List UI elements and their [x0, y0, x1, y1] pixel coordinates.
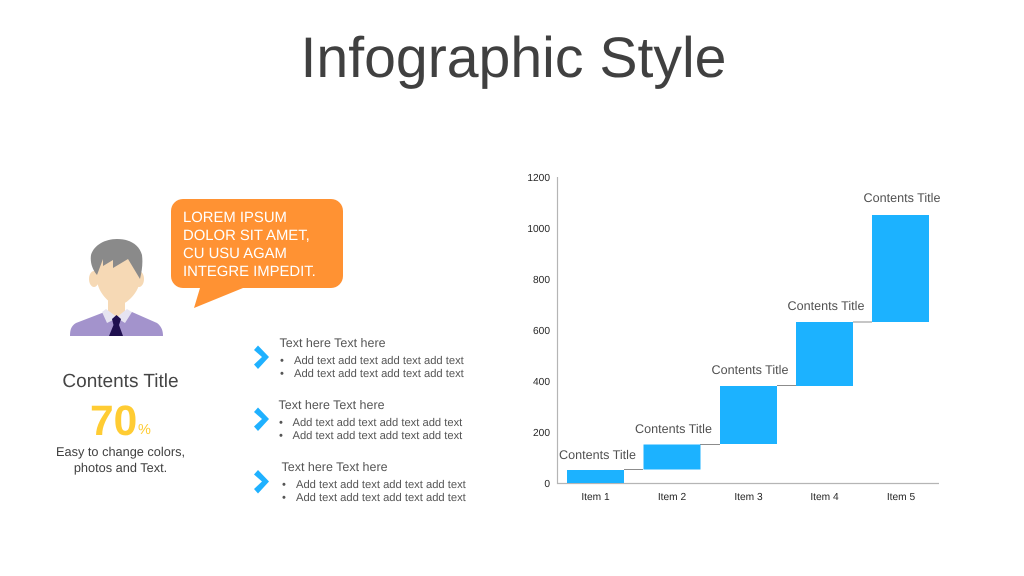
text block: list 2 [278, 398, 463, 442]
panel: list group 1 [254, 336, 465, 380]
text block: list 3: Add text add text add text add text [296, 492, 467, 504]
bar labels: Contents Title [559, 448, 636, 462]
text block: list 2: Add text add text add text add text [292, 430, 463, 442]
bar labels: Contents Title [787, 299, 865, 313]
y axis: 1000 [527, 224, 550, 235]
figure: 70 percent: % [138, 422, 151, 438]
text block: list 3 [282, 460, 467, 504]
panel: list group 3 [254, 460, 467, 504]
bar labels: Contents Title [863, 191, 941, 205]
x axis labels: Item 1 [581, 492, 610, 503]
text block: description: Easy to change colors, [56, 444, 185, 459]
text block: list 2: Text here Text here [278, 398, 385, 412]
callout: speech bubble: CU USU AGAM [183, 246, 287, 262]
connector lines [624, 322, 872, 470]
y axis: 200 [533, 428, 550, 439]
text block: list 1: • [280, 368, 284, 380]
text block: list 1 [280, 336, 465, 380]
x axis labels: Item 4 [810, 492, 839, 503]
text block: list 2: • [279, 430, 283, 442]
y axis [527, 173, 939, 490]
title: Infographic Style [301, 26, 726, 90]
text block: list 2: • [279, 417, 283, 429]
bar labels: Contents Title [711, 363, 789, 377]
text block: list 1: Add text add text add text add text [294, 355, 465, 367]
x axis labels: Item 5 [887, 492, 915, 503]
icon: chevron [254, 408, 269, 431]
text block: list 1: • [280, 355, 284, 367]
text block: list 3: • [282, 492, 286, 504]
bar labels [559, 191, 941, 462]
y axis: 400 [533, 377, 550, 388]
y axis: 1200 [527, 173, 550, 184]
chart: waterfall bar chart [527, 173, 941, 503]
text block: description [56, 444, 185, 475]
text block: list 2: Add text add text add text add text [292, 417, 463, 429]
text block: list 3: Text here Text here [282, 460, 388, 474]
y axis: 800 [533, 275, 550, 286]
panel: list group 2 [254, 398, 463, 442]
heading: contents title: Contents Title [62, 371, 179, 392]
bars [567, 215, 929, 483]
y axis: 0 [544, 479, 550, 490]
text block: list 3: Add text add text add text add text [296, 479, 467, 491]
icon: person avatar [70, 239, 163, 336]
text block: list 1: Text here Text here [280, 336, 386, 350]
panel: key figure [56, 371, 185, 475]
figure: 70 percent: 70 [90, 398, 137, 445]
callout: speech bubble: LOREM IPSUM [183, 210, 287, 226]
callout: speech bubble: INTEGRE IMPEDIT. [183, 264, 316, 280]
text block: list 3: • [282, 479, 286, 491]
x axis labels: Item 2 [658, 492, 686, 503]
bar labels: Contents Title [635, 422, 712, 436]
icon: chevron [254, 470, 269, 494]
text block: list 1: Add text add text add text add text [294, 368, 465, 380]
callout: speech bubble [171, 199, 343, 308]
y axis: 600 [533, 326, 550, 337]
callout: speech bubble: DOLOR SIT AMET, [183, 228, 310, 244]
x axis labels [581, 492, 915, 503]
x axis labels: Item 3 [734, 492, 763, 503]
icon: chevron [254, 346, 269, 369]
text block: description: photos and Text. [74, 460, 167, 475]
